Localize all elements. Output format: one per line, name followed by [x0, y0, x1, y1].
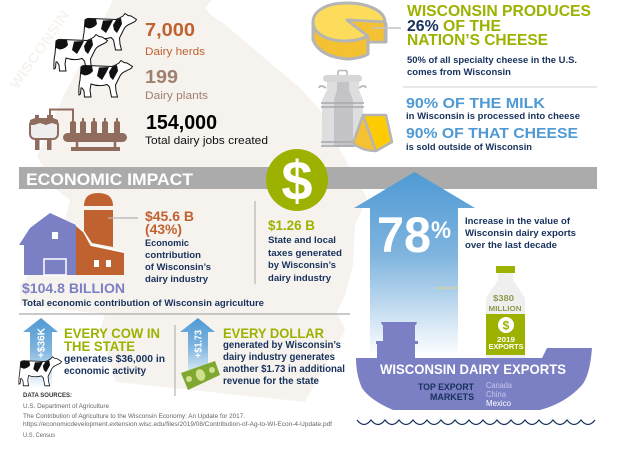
- text: every cow in the state: [64, 326, 165, 377]
- list: export markets: [486, 381, 513, 408]
- stat: dairy industry contribution: of Wisconsin’s: [145, 262, 211, 273]
- stat: dairy jobs: [145, 112, 268, 147]
- stat: taxes generated: [268, 217, 342, 284]
- ship heading: Wisconsin dairy exports: WISCONSIN DAIRY EXPORTS: [380, 361, 566, 377]
- stat: taxes generated: taxes generated: [268, 248, 342, 259]
- stat: total agriculture contribution: [22, 280, 264, 309]
- heading: Wisconsin produces 26%: WISCONSIN PRODUCES: [407, 3, 591, 20]
- text: every cow in the state: THE STATE: [64, 339, 135, 354]
- text: every cow in the state: EVERY COW IN: [64, 326, 160, 341]
- stat: total agriculture contribution: Total economic contribution of Wisconsin agriculture: [22, 298, 264, 309]
- text: every dollar: generated by Wisconsin’s: [223, 340, 341, 351]
- stat: total agriculture contribution: $104.8 BILLION: [22, 280, 125, 296]
- stat: dairy plants: [145, 66, 209, 102]
- icon: milk bottle with 2019 exports: $: [503, 318, 510, 332]
- arrow: 78% increase: [354, 172, 475, 356]
- stat: dairy plants: Dairy plants: [145, 90, 209, 102]
- arrow: +$1.73: [180, 318, 215, 382]
- text: data sources: The Contribution of Agriculture to the Wisconsin Economy: An Update for 2017.: [23, 413, 245, 420]
- text: every dollar: revenue for the state: [223, 376, 319, 387]
- stat: dairy herds: [145, 19, 206, 58]
- text: data sources: https://economicdevelopment.extension.wisc.edu/files/2019/08/Contribution-of-Ag-to-WI-Econ-4-Update.pdf: [23, 421, 332, 428]
- text: increase in exports: over the last decade: [465, 240, 557, 251]
- arrow: +$1.73: +$1.73: [194, 330, 204, 358]
- icon: milk bottle with 2019 exports: 2019: [497, 337, 515, 344]
- text: specialty cheese: [407, 55, 577, 77]
- heading: Wisconsin produces 26%: [407, 3, 591, 49]
- arrow: 78% increase: 78: [377, 207, 431, 263]
- label: top export markets: MARKETS: [430, 392, 474, 402]
- icon: milk bottle with 2019 exports: [486, 266, 525, 358]
- icon: waves: [357, 420, 595, 424]
- stat: dairy industry contribution: dairy industry: [145, 274, 209, 285]
- text: every dollar: dairy industry generates: [223, 352, 335, 363]
- watermark: WISCONSIN: WISCONSIN: [6, 7, 72, 92]
- stat: dairy industry contribution: $45.6 B: [145, 208, 194, 224]
- arrow: +$36K: [23, 318, 58, 388]
- background: Wisconsin state silhouette: [20, 0, 367, 402]
- text: data sources: U.S. Department of Agriculture: [23, 403, 109, 410]
- text: increase in exports: Wisconsin dairy exports: [465, 228, 576, 239]
- icon: barn and silo: [19, 193, 138, 275]
- stat: dairy industry contribution: (43%): [145, 221, 182, 237]
- text: increase in exports: [465, 216, 576, 251]
- icon: milk bottle with 2019 exports: $380: [493, 294, 515, 303]
- stat: dairy jobs: 154,000: [146, 112, 217, 134]
- text: increase in exports: Increase in the value of: [465, 216, 571, 227]
- stat: dairy industry contribution: contribution: [145, 250, 201, 261]
- text: specialty cheese: 50% of all specialty cheese in the U.S.: [407, 55, 577, 65]
- text: every dollar: another $1.73 in additional: [223, 364, 345, 375]
- text: data sources: U.S. Census: [23, 432, 56, 439]
- icon: green dollar circle: $: [281, 149, 313, 212]
- stat: taxes generated: by Wisconsin’s: [268, 260, 336, 271]
- heading band: economic impact: [19, 167, 597, 189]
- arrow: +$36K: +$36K: [36, 327, 48, 358]
- stat: dairy herds: 7,000: [145, 19, 195, 40]
- list: export markets: Mexico: [486, 399, 512, 408]
- text: 90% of the milk: [406, 95, 580, 121]
- stat: taxes generated: $1.26 B: [268, 217, 315, 233]
- text: 90% of that cheese: [406, 125, 578, 152]
- stat: taxes generated: dairy industry: [268, 273, 332, 284]
- icon: cargo ship: [356, 322, 592, 410]
- text: 90% of that cheese: is sold outside of Wisconsin: [406, 142, 532, 152]
- icon: cow: [19, 357, 62, 386]
- text: 90% of the milk: in Wisconsin is processed into cheese: [406, 111, 580, 121]
- icon: milk can and cheese wedge: [319, 70, 392, 151]
- text: every dollar: [223, 326, 345, 387]
- stat: dairy jobs: Total dairy jobs created: [145, 135, 268, 147]
- text: every cow in the state: economic activity: [64, 366, 146, 377]
- list: export markets: Canada: [486, 381, 513, 390]
- heading: Wisconsin produces 26%: NATION’S CHEESE: [407, 32, 548, 49]
- stat: dairy plants: 199: [145, 66, 178, 87]
- stat: dairy industry contribution: Economic: [145, 238, 189, 249]
- text: every dollar: EVERY DOLLAR: [223, 326, 324, 341]
- arrow: 78% increase: %: [431, 217, 451, 244]
- text: 90% of that cheese: 90% OF THAT CHEESE: [406, 125, 578, 142]
- stat: dairy herds: Dairy herds: [145, 46, 206, 58]
- text: specialty cheese: comes from Wisconsin: [407, 67, 511, 77]
- text: data sources: DATA SOURCES:: [23, 392, 72, 399]
- text: 90% of the milk: 90% OF THE MILK: [406, 95, 545, 112]
- stat: taxes generated: State and local: [268, 235, 336, 246]
- list: export markets: China: [486, 390, 507, 399]
- text: data sources: [23, 392, 332, 439]
- icon: dollar bill: [181, 361, 220, 390]
- stat: dairy industry contribution: [145, 208, 211, 285]
- icon: milk bottle with 2019 exports: MILLION: [488, 304, 522, 313]
- icon: milk bottle with 2019 exports: EXPORTS: [488, 344, 524, 351]
- icon: green dollar circle: [266, 149, 328, 212]
- text: every cow in the state: generates $36,000 in: [64, 354, 165, 365]
- label: top export markets: [418, 382, 474, 402]
- heading: Wisconsin produces 26%: 26% OF THE: [407, 18, 501, 35]
- icon: cheese wheel: [313, 3, 401, 59]
- label: top export markets: TOP EXPORT: [418, 382, 474, 392]
- heading band: economic impact: ECONOMIC IMPACT: [26, 170, 194, 189]
- icon: three cows: [54, 14, 136, 97]
- icon: milk processing machinery: [30, 110, 127, 151]
